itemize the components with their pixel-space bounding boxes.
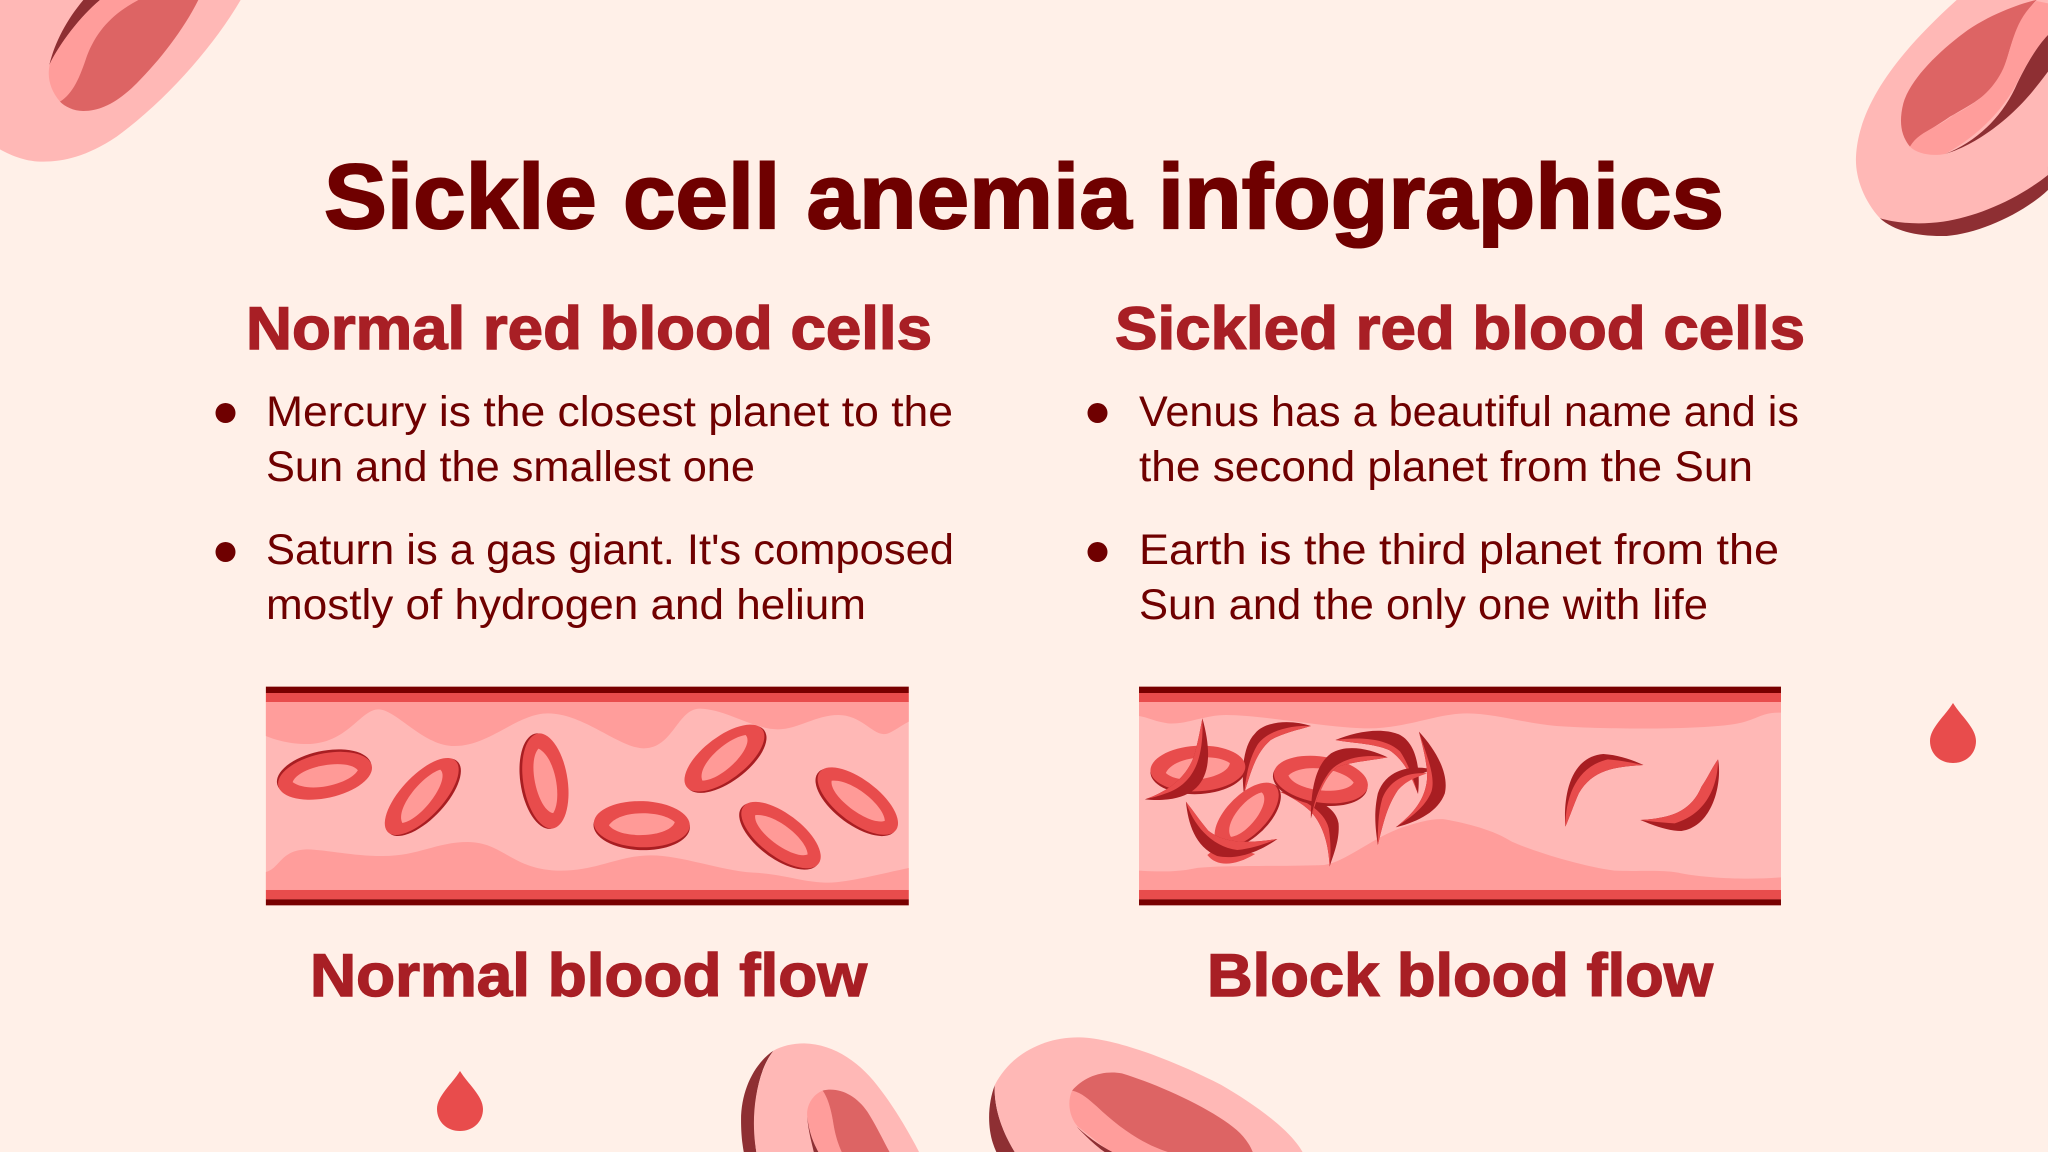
normal cell in cluster: lower [1202, 775, 1294, 856]
crescent cell: far right of cluster [1375, 768, 1427, 845]
caption: normal blood flow: Normal blood flow [310, 942, 867, 1009]
title: Sickle cell anemia infographics [324, 146, 1724, 248]
illustration: blocked blood flow vessel [1139, 687, 1781, 905]
icon: blood drop bottom [437, 1071, 483, 1131]
crescent cell: free lower [1640, 759, 1719, 831]
illustration: normal blood flow vessel [266, 687, 912, 905]
text block: normal cells bullets: Sun and the smallest one [266, 443, 755, 491]
decorative cell: bottom right of centre [989, 1037, 1302, 1152]
text block: sickled cells bullets: Earth is the third planet from the [1139, 526, 1779, 574]
crescent cell: upper right [1335, 731, 1419, 794]
text block: normal cells bullets: Mercury is the closest planet to the [266, 388, 953, 436]
text block: normal cells bullets [216, 388, 954, 629]
decorative cell: bottom left of centre [741, 1043, 919, 1152]
text block: sickled cells bullets: Sun and the only one with life [1139, 581, 1708, 629]
text block: normal cells bullets: Saturn is a gas giant. It's composed [266, 526, 954, 574]
crescent cell: upper [1243, 722, 1311, 794]
heading: normal red blood cells: Normal red blood cells [246, 295, 932, 362]
crescent cell: large lower left [1186, 802, 1277, 864]
caption: block blood flow: Block blood flow [1207, 942, 1713, 1009]
decorative cell: top left corner [0, 0, 241, 162]
icon: blood drop right [1930, 703, 1976, 763]
decorative cell: top right corner [1856, 0, 2048, 236]
normal cell in cluster: middle [1265, 748, 1375, 814]
text block: normal cells bullets: mostly of hydrogen and helium [266, 581, 866, 629]
crescent cell: middle [1311, 748, 1388, 818]
text block: sickled cells bullets: Venus has a beautiful name and is [1139, 388, 1799, 436]
crescent cell: free upper [1565, 754, 1643, 827]
crescent cell: lower middle [1280, 792, 1339, 867]
text block: sickled cells bullets [1088, 388, 1799, 629]
normal cell in cluster: left [1148, 743, 1248, 797]
text block: sickled cells bullets: the second planet from the Sun [1139, 443, 1753, 491]
crescent cell: left [1145, 718, 1208, 800]
heading: sickled red blood cells: Sickled red blood cells [1115, 295, 1805, 362]
crescent cell: rightmost of cluster [1396, 732, 1446, 827]
